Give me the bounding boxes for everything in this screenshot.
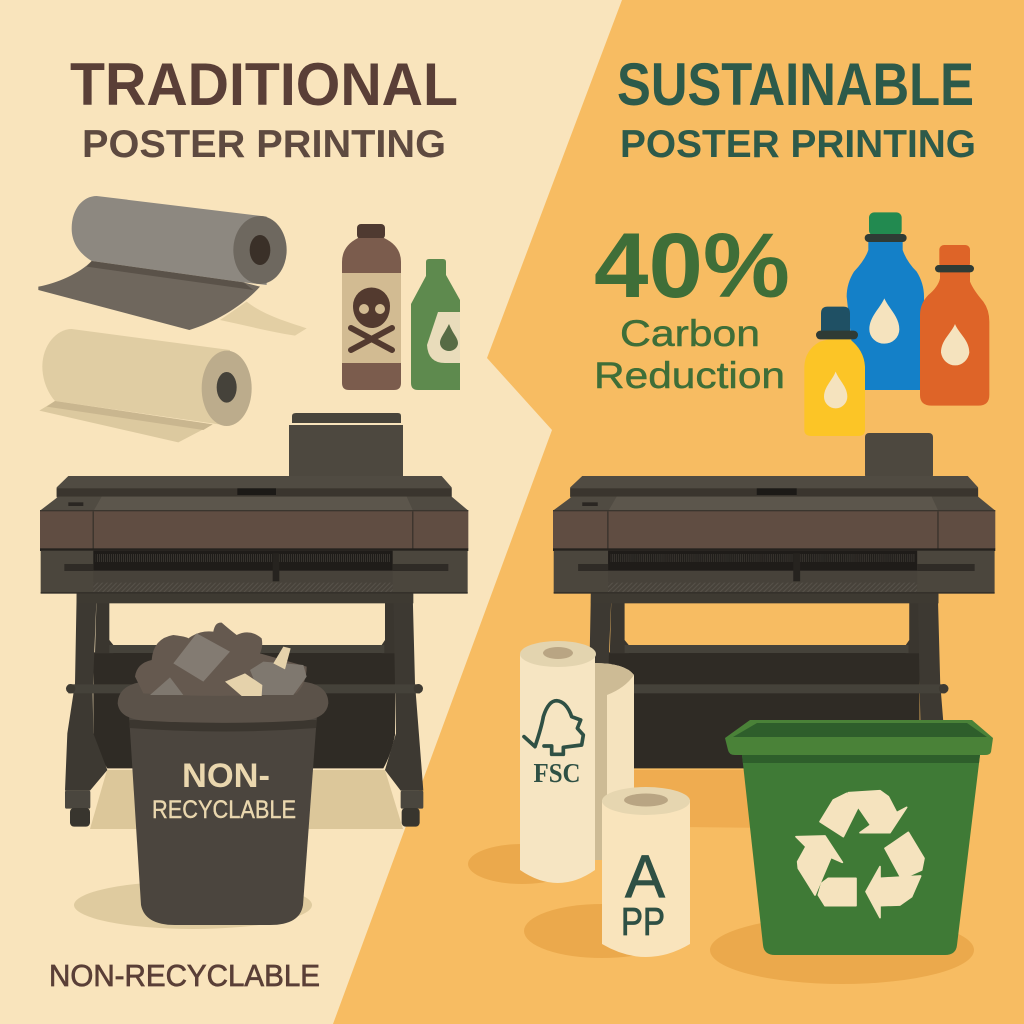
icon: yellow ink bottle <box>804 307 865 436</box>
trash pile <box>135 623 307 696</box>
title word: traditional: TRADITIONAL <box>70 51 458 118</box>
bin label: NON- <box>182 757 270 795</box>
FSC label: FSC <box>534 758 580 788</box>
printer: sustainable <box>553 476 995 827</box>
callout: 40% carbon reduction: Carbon <box>620 313 760 354</box>
bottom label: non-recyclable: NON-RECYCLABLE <box>49 958 320 993</box>
icon: recycling symbol <box>796 791 924 918</box>
bin label: RECYCLABLE <box>152 796 296 824</box>
right background panel with arrow-notch divider <box>333 0 1024 1024</box>
APP label: A <box>625 843 665 910</box>
APP label: PP <box>621 901 665 944</box>
subtitle: poster printing: POSTER PRINTING <box>620 123 976 166</box>
icon: APP paper roll <box>602 787 690 957</box>
icon: green bottle <box>411 259 460 390</box>
printer: traditional <box>40 476 468 827</box>
bin shadow: non-recyclable <box>74 881 312 929</box>
icon: skull and crossbones <box>351 288 392 350</box>
heading: traditional <box>70 51 458 166</box>
icon: grey paper roll <box>38 196 307 336</box>
callout: 40% carbon reduction: Reduction <box>594 355 785 396</box>
icon: toxic brown bottle <box>342 224 401 390</box>
icon: beige paper roll <box>39 329 252 442</box>
icon: orange ink bottle <box>920 245 989 406</box>
roll shadows <box>468 844 974 984</box>
icon: green recycling bin <box>725 720 993 955</box>
printer hopper: traditional <box>289 413 403 477</box>
icon: FSC tree logo <box>524 701 583 754</box>
printer stand floor shadow: left <box>90 770 403 829</box>
bin: non-recyclable <box>118 623 328 925</box>
icon: FSC paper roll <box>520 641 596 883</box>
callout: 40% carbon reduction: 40% <box>594 215 790 317</box>
printer stand floor shadow: right <box>590 770 950 830</box>
printer hopper: sustainable <box>865 433 933 479</box>
icon: curled sheet behind FSC roll <box>594 663 634 860</box>
subtitle: poster printing: POSTER PRINTING <box>82 123 446 166</box>
callout: 40% carbon reduction <box>594 215 790 396</box>
bin label <box>152 757 296 824</box>
heading: sustainable <box>617 51 976 166</box>
APP label <box>621 843 665 944</box>
icon: blue ink bottle <box>847 212 924 390</box>
